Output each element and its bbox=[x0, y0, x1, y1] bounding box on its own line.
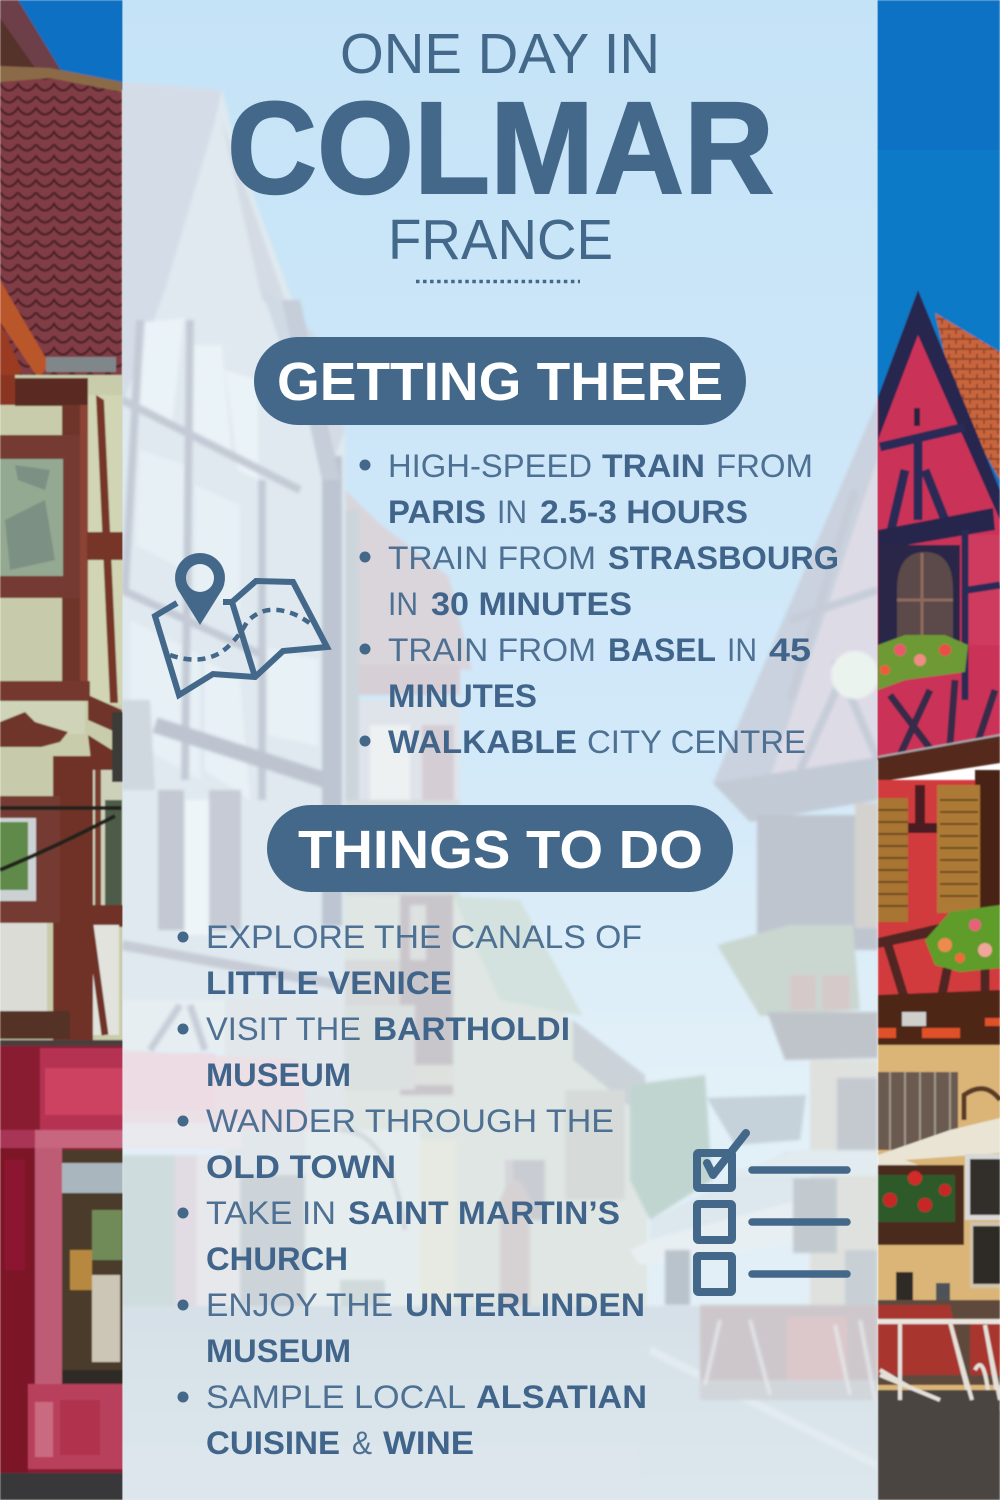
translucent centre panel with faded street scene bbox=[122, 0, 879, 1500]
list: things to do bbox=[178, 919, 647, 1461]
item: train from strasbourg: IN bbox=[388, 586, 418, 622]
item: train from basel: 45 bbox=[769, 632, 811, 668]
lower flower box bbox=[925, 905, 1000, 972]
title line: one day in: ONE DAY IN bbox=[340, 22, 660, 86]
item: train from paris: PARIS bbox=[388, 494, 486, 530]
red flowers window bbox=[878, 1165, 964, 1245]
item: unterlinden museum: MUSEUM bbox=[206, 1333, 351, 1369]
item: train from basel: TRAIN FROM bbox=[388, 632, 596, 668]
brown floor beam bbox=[878, 735, 1000, 782]
item: train from basel: BASEL bbox=[608, 632, 716, 668]
title line: colmar: COLMAR bbox=[227, 74, 774, 221]
cream wall bbox=[878, 1045, 1000, 1390]
item: train from basel: IN bbox=[727, 632, 757, 668]
list: getting there bbox=[360, 448, 839, 760]
dotted divider bbox=[416, 280, 580, 283]
item: alsatian cuisine and wine: & bbox=[352, 1425, 372, 1461]
item: train from paris bbox=[360, 448, 813, 530]
item: train from basel: MINUTES bbox=[388, 678, 537, 714]
item: old town: OLD TOWN bbox=[206, 1149, 396, 1185]
faded centre-left street houses bbox=[225, 895, 647, 1345]
red lower wall with shutters bbox=[878, 780, 1000, 995]
section heading: things to do: THINGS TO DO bbox=[298, 820, 703, 880]
item: little venice bbox=[178, 919, 642, 1001]
ground bbox=[878, 1390, 1000, 1500]
left photo strip: half-timbered house and red shopfront bbox=[0, 0, 123, 1500]
tables and red chairs bbox=[878, 1300, 1000, 1385]
item: unterlinden museum: UNTERLINDEN bbox=[405, 1287, 645, 1323]
faded middle house with red roof bbox=[345, 490, 472, 1000]
faded right red house bbox=[713, 400, 879, 950]
faded right balcony and cafe bbox=[700, 925, 878, 1400]
flower box bbox=[878, 635, 968, 690]
item: alsatian cuisine and wine: CUISINE bbox=[206, 1425, 340, 1461]
item: bartholdi museum: BARTHOLDI bbox=[373, 1011, 570, 1047]
item: train from strasbourg: TRAIN FROM bbox=[388, 540, 596, 576]
item: train from paris: FROM bbox=[716, 448, 813, 484]
roof ridge bbox=[0, 0, 62, 72]
item: walkable city centre: WALKABLE bbox=[388, 724, 577, 760]
item: old town: WANDER THROUGH THE bbox=[206, 1103, 614, 1139]
icon: checklist bbox=[697, 1133, 847, 1292]
title block bbox=[227, 22, 774, 282]
item: train from strasbourg bbox=[360, 540, 839, 622]
parasol bbox=[878, 1118, 1000, 1168]
item: bartholdi museum: MUSEUM bbox=[206, 1057, 351, 1093]
section heading: things to do bbox=[267, 805, 733, 892]
item: saint martin's church: TAKE IN bbox=[206, 1195, 336, 1231]
item: train from strasbourg: 30 MINUTES bbox=[431, 586, 632, 622]
item: saint martin's church: CHURCH bbox=[206, 1241, 348, 1277]
navy timbers bbox=[880, 427, 965, 535]
right photo strip: red timbered gable and cafe terrace bbox=[877, 0, 1000, 1500]
title line: france: FRANCE bbox=[388, 208, 613, 272]
section heading: getting there bbox=[254, 337, 746, 425]
faded distant roofs and trees bbox=[630, 1075, 810, 1305]
item: walkable city centre bbox=[360, 724, 806, 760]
red shopfront bbox=[0, 1040, 123, 1477]
item: train from paris: HIGH-SPEED bbox=[388, 448, 592, 484]
item: unterlinden museum bbox=[178, 1287, 645, 1369]
window grille bbox=[878, 1072, 958, 1150]
item: old town bbox=[178, 1103, 614, 1185]
item: unterlinden museum: ENJOY THE bbox=[206, 1287, 393, 1323]
item: train from strasbourg: STRASBOURG bbox=[608, 540, 839, 576]
tiled roof bbox=[0, 68, 122, 380]
item: saint martin's church bbox=[178, 1195, 620, 1277]
item: alsatian cuisine and wine: ALSATIAN bbox=[476, 1379, 647, 1415]
icon: map with location pin bbox=[155, 553, 327, 695]
orange roof bbox=[935, 313, 1000, 480]
item: bartholdi museum bbox=[178, 1011, 570, 1093]
faded pink shopfront bbox=[122, 1004, 420, 1307]
item: alsatian cuisine and wine: SAMPLE LOCAL bbox=[206, 1379, 466, 1415]
item: train from paris: 2.5-3 HOURS bbox=[540, 494, 748, 530]
item: walkable city centre: CITY CENTRE bbox=[587, 724, 806, 760]
section heading: getting there: GETTING THERE bbox=[277, 352, 723, 412]
item: train from paris: TRAIN bbox=[602, 448, 705, 484]
item: little venice: EXPLORE THE CANALS OF bbox=[206, 919, 642, 955]
half-timbered wall bbox=[0, 375, 123, 1045]
item: bartholdi museum: VISIT THE bbox=[206, 1011, 361, 1047]
item: saint martin's church: SAINT MARTIN’S bbox=[348, 1195, 620, 1231]
red gable wall bbox=[877, 300, 1000, 760]
balcony beam bbox=[878, 990, 1000, 1050]
item: train from paris: IN bbox=[497, 494, 527, 530]
item: little venice: LITTLE VENICE bbox=[206, 965, 452, 1001]
faded street bbox=[122, 1306, 878, 1500]
item: alsatian cuisine and wine bbox=[178, 1379, 647, 1461]
item: alsatian cuisine and wine: WINE bbox=[383, 1425, 474, 1461]
gutter bbox=[0, 280, 50, 378]
item: train from basel bbox=[360, 632, 811, 714]
chalkboards bbox=[965, 1154, 1000, 1220]
faded left house: roof and gable bbox=[122, 82, 345, 1050]
